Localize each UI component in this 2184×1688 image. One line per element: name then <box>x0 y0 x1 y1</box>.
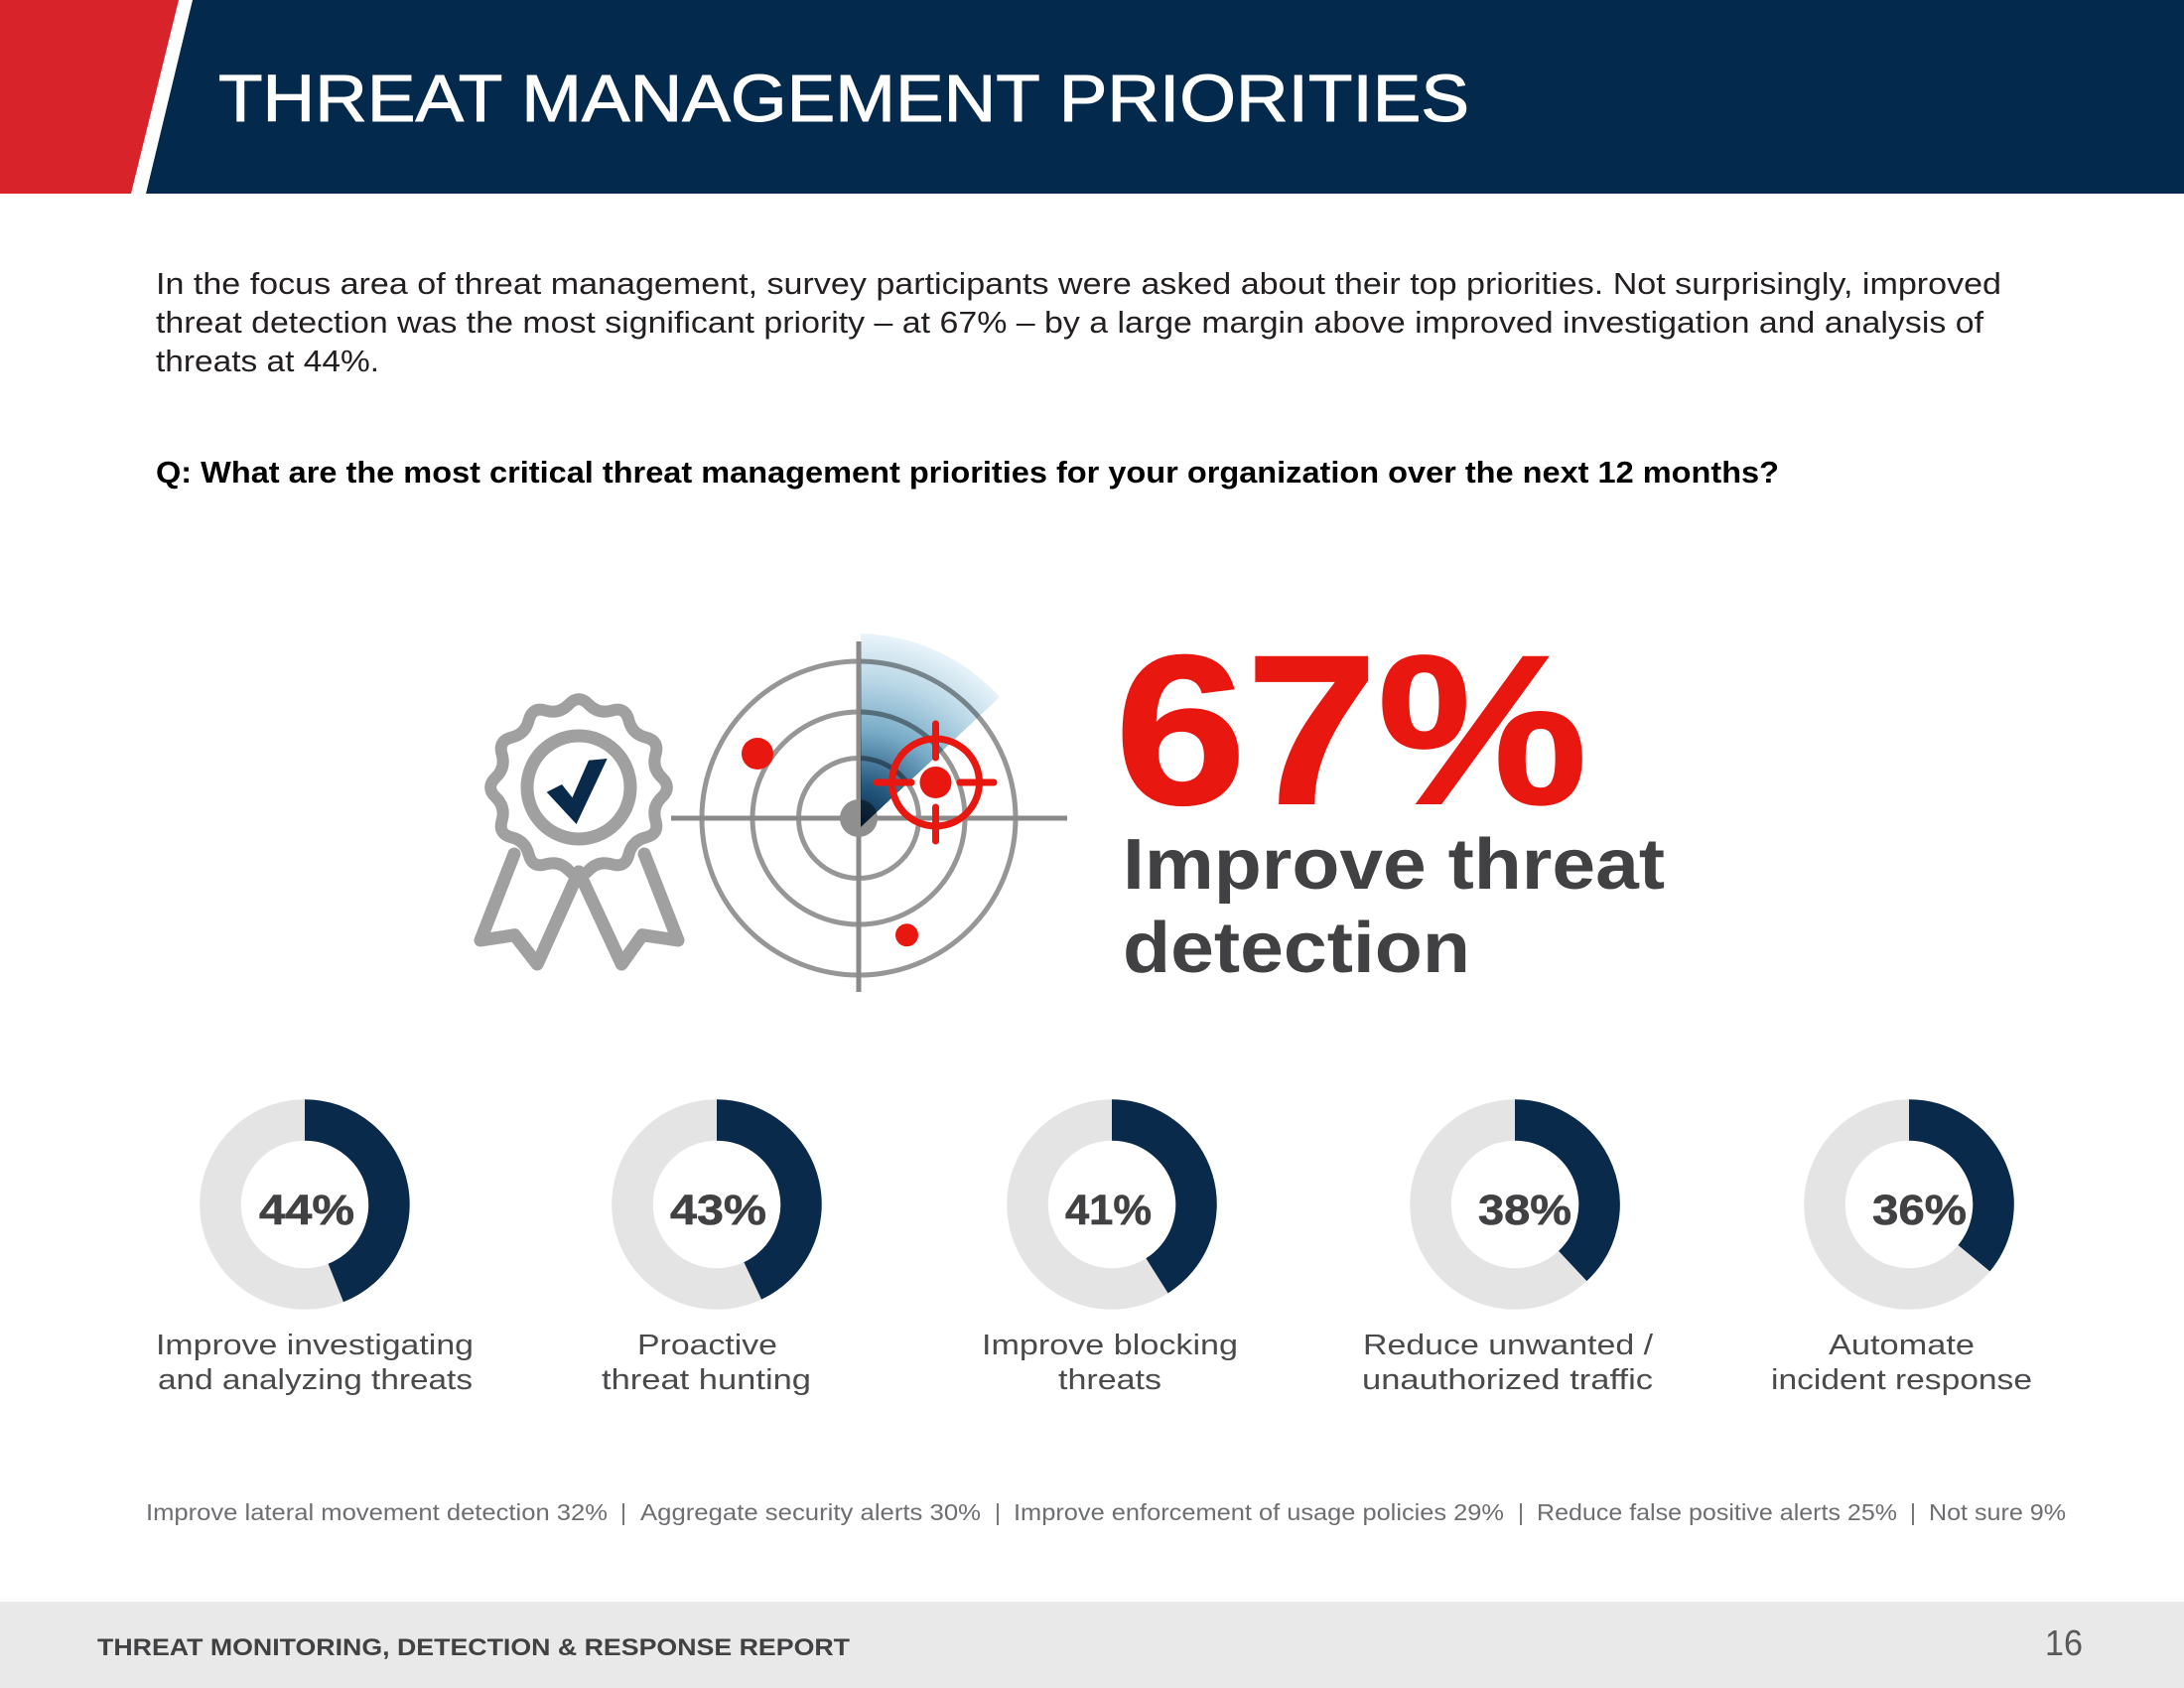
donut: 41 percent: Improve blocking <box>982 1330 1238 1361</box>
other responses line: Improve enforcement of usage policies 29% <box>1014 1499 1504 1525</box>
title: THREAT MANAGEMENT PRIORITIES <box>218 62 1469 136</box>
donut: 43 percent <box>602 1120 811 1396</box>
red target crosshair <box>877 724 994 841</box>
donut: 36 percent: Automate <box>1829 1330 1975 1361</box>
intro paragraph: threats at 44%. <box>156 344 379 378</box>
donut: 44 percent <box>156 1120 474 1396</box>
donut: 41 percent <box>982 1120 1238 1396</box>
radar rings and cross hairs <box>671 641 1067 992</box>
footer bar <box>0 1602 2184 1688</box>
donut: 43 percent: Proactive <box>637 1330 777 1361</box>
donut: 38 percent: Reduce unwanted / <box>1363 1330 1653 1361</box>
other responses line: | <box>1910 1499 1916 1525</box>
other responses line: | <box>1518 1499 1524 1525</box>
donut: 36 percent: incident response <box>1771 1364 2032 1396</box>
donut: 44 percent: Improve investigating <box>156 1330 474 1361</box>
donut: 36 percent: 36% <box>1872 1187 1967 1234</box>
icon: check mark <box>547 759 608 824</box>
intro paragraph: threat detection was the most significant priority – at 67% – by a large margin above improved investigation and analysis of <box>156 305 1983 340</box>
radar blip lower <box>895 923 918 946</box>
navy header block <box>146 0 2184 194</box>
67 percent value: 67% <box>1115 612 1587 849</box>
icon: radar with target <box>671 633 1067 992</box>
donut: 38 percent: 38% <box>1478 1187 1571 1234</box>
headline label: detection <box>1123 909 1470 988</box>
badge inner ring <box>527 736 630 839</box>
report name: THREAT MONITORING, DETECTION & RESPONSE REPORT <box>97 1634 850 1661</box>
red header block <box>0 0 179 194</box>
headline label: Improve threat <box>1123 825 1665 905</box>
headline label <box>1123 825 1665 988</box>
other responses line <box>146 1499 2066 1525</box>
survey question: Q: What are the most critical threat management priorities for your organization over the next 12 months? <box>156 455 1779 490</box>
donut: 38 percent: unauthorized traffic <box>1362 1364 1653 1396</box>
donut: 43 percent: 43% <box>670 1187 766 1234</box>
donut: 38 percent <box>1362 1120 1653 1396</box>
badge ribbons <box>480 854 678 964</box>
other responses line: | <box>995 1499 1001 1525</box>
intro paragraph <box>156 266 2001 378</box>
other responses line: Not sure 9% <box>1929 1499 2066 1525</box>
intro paragraph: In the focus area of threat management, survey participants were asked about their top priorities. Not surprisingly, improved <box>156 266 2001 301</box>
other responses line: Improve lateral movement detection 32% <box>146 1499 608 1525</box>
donut: 41 percent: 41% <box>1065 1187 1152 1234</box>
donut: 43 percent: threat hunting <box>602 1364 811 1396</box>
other responses line: Reduce false positive alerts 25% <box>1537 1499 1897 1525</box>
badge scalloped edge <box>490 699 667 876</box>
donut: 36 percent <box>1771 1120 2032 1396</box>
radar sweep <box>861 633 1000 827</box>
other responses line: Aggregate security alerts 30% <box>640 1499 981 1525</box>
other responses line: | <box>620 1499 626 1525</box>
donut: 44 percent: 44% <box>259 1187 354 1234</box>
headline statistic <box>1115 612 1665 988</box>
radar hub <box>840 799 878 837</box>
header banner <box>0 0 2184 194</box>
icon: award ribbon badge <box>480 699 678 964</box>
donut: 44 percent: and analyzing threats <box>158 1364 473 1396</box>
radar blip upper left <box>742 738 773 770</box>
donut: 41 percent: threats <box>1058 1364 1161 1396</box>
page number: 16 <box>2045 1622 2083 1663</box>
